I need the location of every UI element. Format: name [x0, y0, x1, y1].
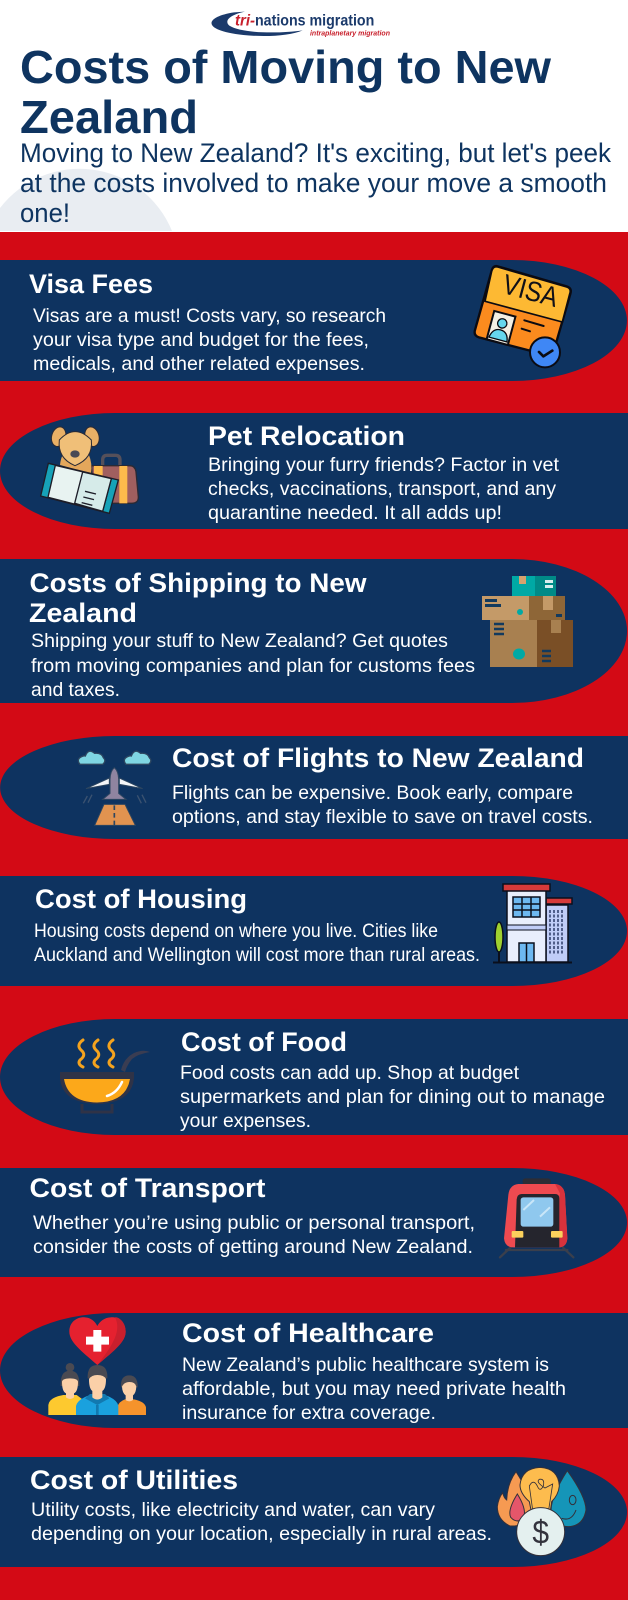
- text: shipping: [31, 630, 475, 701]
- text: housing: [34, 920, 480, 966]
- subtitle: one!: [20, 198, 70, 228]
- logo: tri-: [235, 13, 255, 30]
- text: utilities: depending on your location, especially in rural areas.: [31, 1523, 492, 1545]
- text: flights: options, and stay flexible to save on travel costs.: [172, 806, 593, 828]
- text: food: Food costs can add up. Shop at budget: [180, 1062, 520, 1084]
- heading: transport: Cost of Transport: [30, 1173, 266, 1203]
- heading: healthcare: Cost of Healthcare: [182, 1318, 434, 1348]
- heading: housing: Cost of Housing: [35, 884, 247, 914]
- text: utilities: [31, 1499, 492, 1545]
- text: shipping: Shipping your stuff to New Zealand? Get quotes: [31, 630, 448, 652]
- text: healthcare: [182, 1354, 566, 1424]
- text: pet relocation: Bringing your furry friends? Factor in vet: [208, 454, 560, 476]
- icon: train: [500, 1178, 573, 1257]
- panel: transport: [0, 1168, 627, 1277]
- text: transport: consider the costs of getting around New Zealand.: [33, 1236, 473, 1258]
- icon: visa card: [475, 266, 571, 367]
- text: flights: [172, 782, 593, 828]
- logo: [212, 12, 390, 38]
- text: pet relocation: checks, vaccinations, transport, and any: [208, 478, 556, 500]
- heading: flights: Cost of Flights to New Zealand: [172, 743, 584, 773]
- panel: utilities: [0, 1457, 627, 1567]
- icon: buildings: [493, 884, 572, 962]
- title: [20, 41, 551, 143]
- icon: plane on runway: [78, 751, 151, 825]
- icon: visa card: VISA: [499, 269, 562, 313]
- heading: food: Cost of Food: [181, 1027, 347, 1057]
- heading: shipping: Costs of Shipping to New: [30, 568, 368, 598]
- text: housing: Housing costs depend on where you live. Cities like: [34, 920, 438, 942]
- text: visa fees: medicals, and other related expenses.: [33, 353, 365, 375]
- text: transport: [33, 1212, 475, 1258]
- heading: shipping: Zealand: [29, 598, 137, 628]
- text: food: your expenses.: [180, 1110, 311, 1132]
- icon: dog and luggage: [41, 425, 138, 513]
- text: flights: Flights can be expensive. Book early, compare: [172, 782, 573, 804]
- text: healthcare: insurance for extra coverage.: [182, 1402, 436, 1424]
- decorative header circle: [0, 169, 172, 231]
- subtitle: [20, 138, 612, 228]
- text: food: [180, 1062, 605, 1132]
- panel: flights: [0, 736, 628, 839]
- text: pet relocation: quarantine needed. It all adds up!: [208, 502, 502, 524]
- panel: healthcare: [0, 1313, 628, 1428]
- text: transport: Whether you’re using public or personal transport,: [33, 1212, 475, 1234]
- subtitle: Moving to New Zealand? It's exciting, but let's peek: [20, 138, 612, 168]
- heading: utilities: Cost of Utilities: [30, 1465, 238, 1495]
- text: shipping: from moving companies and plan for customs fees: [31, 655, 475, 677]
- icon: stacked boxes: [482, 576, 573, 667]
- panel: pet relocation: [0, 413, 628, 529]
- subtitle: at the costs involved to make your move a smooth: [20, 168, 607, 198]
- text: visa fees: [33, 305, 386, 375]
- logo: nations migration: [255, 13, 374, 30]
- icon: bowl of soup: [60, 1040, 150, 1112]
- panel: shipping: [0, 559, 627, 703]
- title: Costs of Moving to New: [20, 41, 551, 93]
- text: food: supermarkets and plan for dining out to manage: [180, 1086, 605, 1108]
- text: shipping: and taxes.: [31, 679, 120, 701]
- text: healthcare: New Zealand’s public healthcare system is: [182, 1354, 549, 1376]
- header panel: [0, 0, 628, 232]
- text: utilities: Utility costs, like electricity and water, can vary: [31, 1499, 435, 1521]
- icon: flame, bulb, water and coin: $: [532, 1514, 549, 1551]
- icon: flame, bulb, water and coin: [497, 1467, 586, 1556]
- text: pet relocation: [208, 454, 560, 524]
- logo: intraplanetary migration: [310, 29, 390, 38]
- text: visa fees: Visas are a must! Costs vary, so research: [33, 305, 386, 327]
- text: visa fees: your visa type and budget for the fees,: [33, 329, 369, 351]
- panel: food: [0, 1019, 628, 1135]
- heading: visa fees: Visa Fees: [29, 269, 153, 299]
- title: Zealand: [20, 91, 198, 143]
- panel: housing: [0, 876, 627, 986]
- icon: heart and family: [48, 1317, 146, 1415]
- text: housing: Auckland and Wellington will cost more than rural areas.: [34, 944, 480, 966]
- heading: shipping: [29, 568, 368, 628]
- text: healthcare: affordable, but you may need private health: [182, 1378, 566, 1400]
- panel: visa fees: [0, 260, 627, 381]
- heading: pet relocation: Pet Relocation: [208, 421, 405, 451]
